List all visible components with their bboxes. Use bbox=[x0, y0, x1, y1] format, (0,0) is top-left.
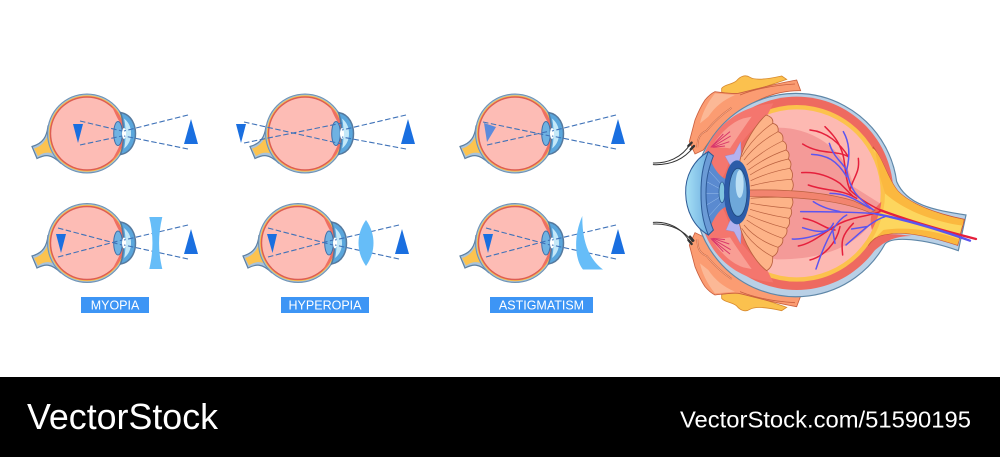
retina bbox=[768, 105, 885, 282]
anterior small lens bbox=[719, 182, 725, 203]
convex lens bbox=[358, 220, 374, 266]
light rays bbox=[58, 225, 188, 259]
retinal veins bbox=[792, 132, 970, 269]
choroid bbox=[700, 97, 893, 290]
cylindrical lens bbox=[576, 216, 603, 270]
label: myopia: MYOPIA bbox=[91, 298, 140, 312]
blurred image triangle bbox=[484, 123, 496, 142]
light rays bbox=[268, 225, 399, 259]
image triangle in front of retina bbox=[73, 124, 83, 143]
object triangle bbox=[401, 119, 415, 144]
eye: hyperopia corrected bbox=[243, 203, 409, 283]
iris bbox=[705, 157, 728, 230]
vessel junction wedge bbox=[871, 202, 881, 230]
lower choroid wedge at nerve bbox=[867, 234, 912, 257]
optic nerve bbox=[853, 147, 964, 245]
footer brand: VectorStock bbox=[27, 396, 219, 437]
eye: hyperopia uncorrected bbox=[236, 94, 415, 174]
object triangle bbox=[611, 119, 625, 144]
light rays bbox=[244, 115, 406, 149]
ciliary body upper bbox=[703, 103, 773, 178]
upper eye muscle and fat bbox=[689, 76, 801, 154]
lower eye muscle and fat bbox=[689, 233, 801, 311]
upper nerve shading bbox=[875, 150, 964, 226]
object triangle bbox=[611, 229, 625, 254]
panel: myopia bbox=[32, 94, 198, 313]
light rays bbox=[483, 115, 616, 149]
cornea bbox=[686, 152, 713, 235]
eye anatomy cross-section bbox=[653, 76, 976, 311]
lower nerve shading bbox=[871, 229, 959, 245]
crystalline lens bbox=[724, 160, 750, 224]
eye: myopia uncorrected bbox=[32, 94, 198, 174]
image triangle behind retina bbox=[236, 124, 246, 143]
light rays bbox=[486, 225, 616, 259]
object triangle bbox=[184, 119, 198, 144]
eye: astigmatism corrected bbox=[460, 203, 625, 283]
label: hyperopia: HYPEROPIA bbox=[289, 298, 362, 312]
retinal arteries bbox=[798, 127, 976, 260]
zonule fibres bbox=[725, 142, 742, 244]
object triangle bbox=[184, 229, 198, 254]
eye: astigmatism uncorrected bbox=[460, 94, 625, 174]
panel: hyperopia bbox=[236, 94, 415, 313]
concave lens bbox=[149, 217, 162, 269]
ciliary body lower bbox=[703, 207, 773, 282]
eye: myopia corrected bbox=[32, 203, 198, 283]
inner vitreous shading bbox=[765, 128, 880, 259]
footer url: VectorStock.com/51590195 bbox=[680, 406, 971, 432]
label: astigmatism: ASTIGMATISM bbox=[499, 298, 584, 312]
image triangle on retina bbox=[56, 234, 66, 253]
hyaloid canal bbox=[748, 190, 875, 213]
image triangle on retina bbox=[267, 234, 277, 253]
label: myopia bbox=[81, 297, 149, 313]
sclera and optic nerve sheath bbox=[694, 93, 966, 297]
panel: astigmatism bbox=[460, 94, 625, 313]
vitreous body bbox=[768, 109, 881, 278]
light rays bbox=[80, 115, 188, 149]
ciliary fibres fan bbox=[739, 115, 793, 271]
footer bar bbox=[0, 377, 1000, 457]
object triangle bbox=[395, 229, 409, 254]
image triangle on retina bbox=[483, 234, 493, 253]
eyelashes bbox=[653, 143, 694, 244]
